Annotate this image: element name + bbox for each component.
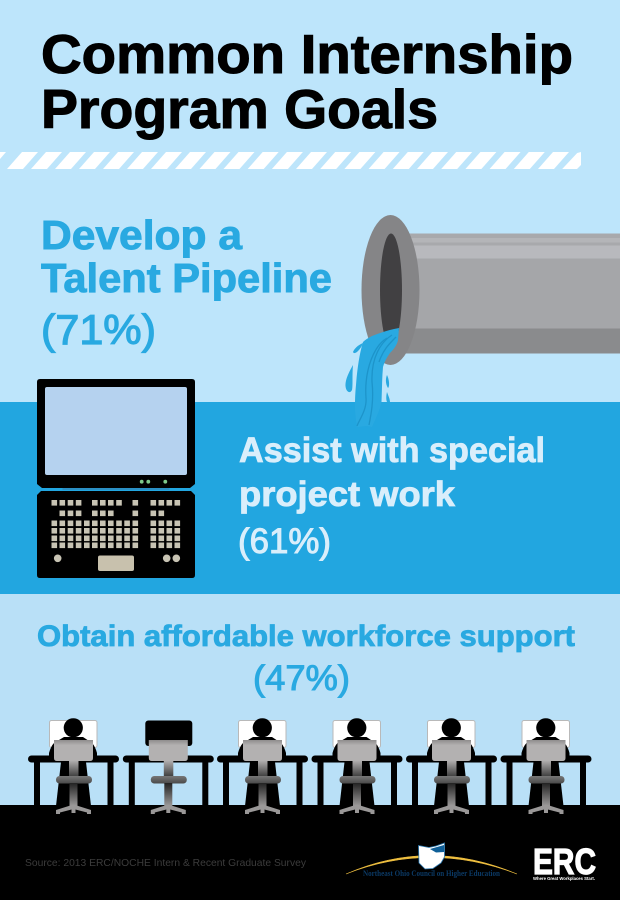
laptop base — [37, 491, 195, 578]
heading: talent pipeline: Talent Pipeline — [41, 255, 332, 301]
heading: talent pipeline: Develop a — [41, 212, 243, 258]
workstation 1 — [28, 718, 119, 814]
keyboard — [52, 500, 180, 562]
heading: special project work: Assist with special — [239, 431, 545, 470]
heading: affordable workforce support: (47%) — [253, 659, 350, 698]
workstation 6 — [500, 718, 592, 814]
pipe body — [405, 234, 620, 354]
workstation 2: empty chair with monitor — [123, 720, 214, 814]
hinge line — [62, 488, 170, 490]
logo arc — [346, 856, 517, 874]
title: Program Goals — [41, 78, 438, 140]
striped divider — [0, 152, 581, 169]
logo: ERC: Where Great Workplaces Start. — [533, 876, 595, 882]
icon: laptop — [37, 379, 195, 578]
heading: special project work — [238, 431, 545, 561]
logo text: Northeast Ohio Council on Higher Education — [363, 869, 500, 878]
laptop screen lid — [37, 379, 195, 488]
title: Common Internship — [41, 23, 573, 85]
heading: affordable workforce support — [37, 620, 575, 698]
workstation 4 — [312, 718, 402, 814]
water shading — [357, 335, 396, 426]
heading: talent pipeline — [41, 212, 332, 353]
blue band — [0, 402, 620, 594]
heading: special project work: project work — [239, 475, 456, 514]
water — [345, 328, 399, 427]
screen — [45, 387, 187, 475]
workstation 3 — [217, 718, 308, 814]
logo state shape — [418, 843, 444, 869]
icon: pipe pouring water — [345, 215, 620, 427]
title — [41, 23, 573, 140]
logo: Northeast Ohio Council on Higher Education — [346, 843, 517, 878]
heading: special project work: (61%) — [238, 522, 331, 561]
pipe opening — [380, 234, 402, 346]
heading: talent pipeline: (71%) — [41, 306, 156, 353]
pipe rim — [362, 215, 420, 365]
logo: ERC: ERC — [533, 841, 596, 882]
lower background panel — [0, 594, 620, 806]
footer bar — [0, 805, 620, 900]
touchpad — [98, 556, 134, 571]
status lights — [140, 480, 167, 484]
logo state lake — [430, 845, 444, 852]
heading: affordable workforce support: Obtain affordable workforce support — [37, 620, 575, 653]
source note: Source: 2013 ERC/NOCHE Intern & Recent Graduate Survey — [25, 857, 307, 869]
workstation 5 — [406, 718, 497, 814]
